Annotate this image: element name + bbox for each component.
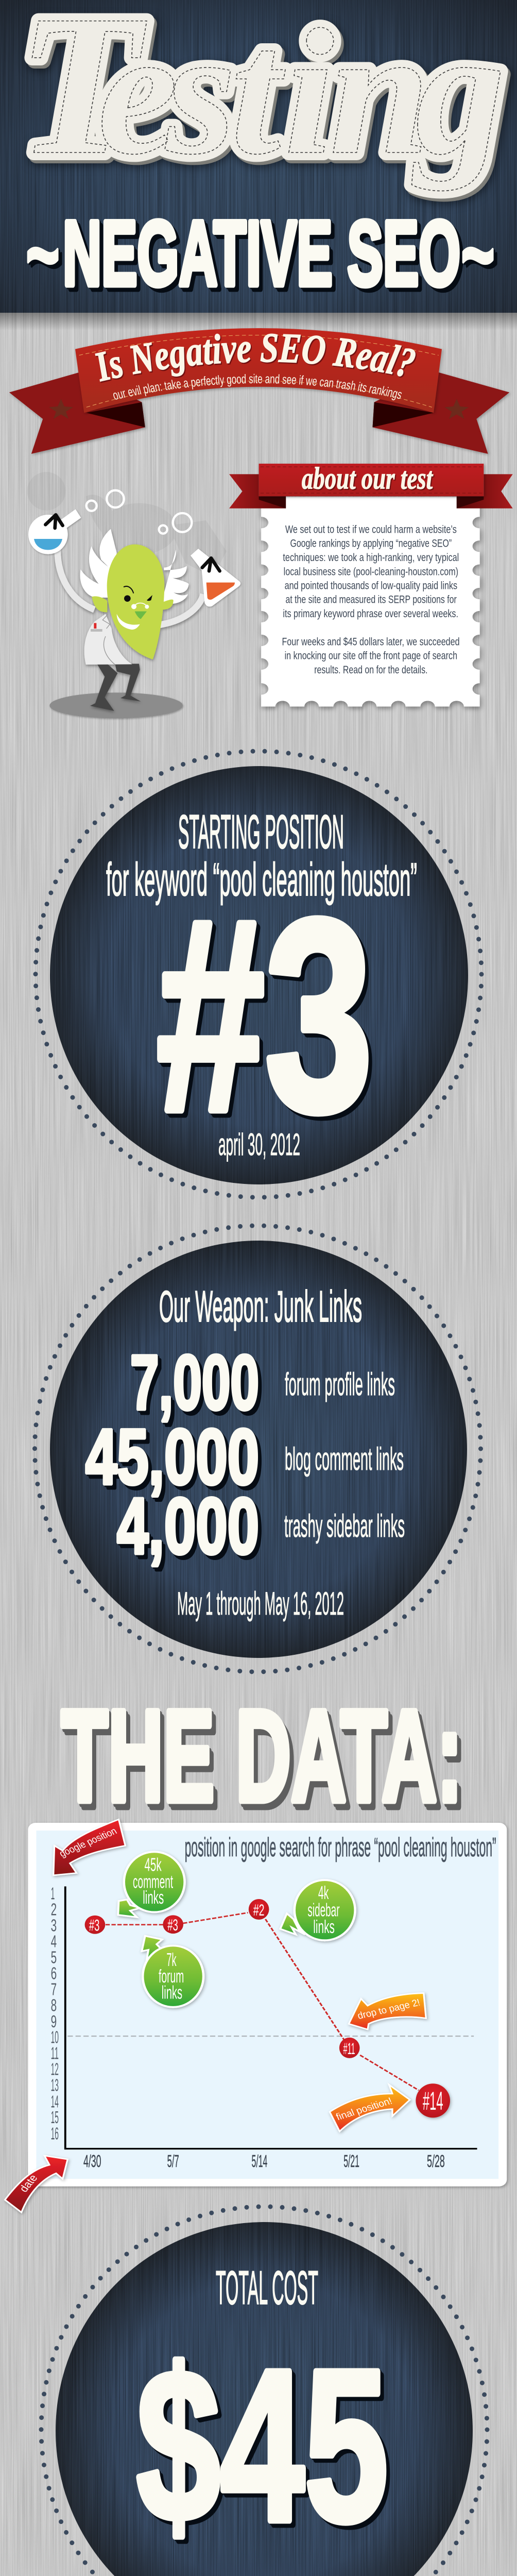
callout: 45k comment links: 45k — [144, 1855, 162, 1875]
callout: 45k comment links — [118, 1852, 185, 1917]
x axis labels: 5/21 — [343, 2151, 359, 2171]
arrow: date: date — [17, 2173, 40, 2194]
ribbon tail right — [373, 371, 509, 454]
arrow: final position — [330, 2084, 410, 2131]
callout: 4k sidebar links: sidebar — [307, 1900, 340, 1921]
panel: chart: 15 — [51, 2108, 59, 2127]
x axis labels — [83, 2151, 445, 2171]
icon: ghost shadows — [27, 472, 227, 577]
panel: chart: 13 — [51, 2075, 59, 2095]
y axis labels: 7 — [51, 1979, 57, 1999]
ribbon body — [259, 464, 484, 496]
arrow: date — [5, 2156, 67, 2212]
icon: orange conical flask — [191, 549, 240, 606]
stat: 7,000: 7,000 — [130, 1339, 259, 1426]
panel: about our test — [229, 461, 513, 706]
arrow: google position — [54, 1819, 125, 1875]
header panel — [0, 0, 517, 330]
data point: #11: #11 — [343, 2040, 355, 2058]
ribbon heading: Is Negative SEO Real? — [95, 334, 417, 383]
panel: starting position: april 30, 2012 — [218, 1127, 300, 1162]
callout: 4k sidebar links: links — [313, 1917, 335, 1937]
dotted ring — [35, 1226, 481, 1672]
stamp paper — [261, 497, 480, 706]
panel: chart: 5/28 — [427, 2151, 445, 2171]
rank line — [106, 1913, 419, 2090]
panel: total cost — [41, 2207, 487, 2576]
ribbon: Is Negative SEO Real? — [9, 328, 511, 455]
callout: 7k forum links — [142, 1936, 203, 2007]
data point: #3: #3 — [167, 1917, 178, 1935]
stat: 45,000: 45,000 — [85, 1413, 259, 1501]
callout: 45k comment links: links — [143, 1888, 164, 1908]
heading: about our test: about our test — [302, 461, 433, 496]
icon: bubbles — [87, 490, 192, 534]
big number: $45: $45 — [136, 2325, 388, 2567]
data point: #14 — [416, 2083, 450, 2117]
mad scientist character — [27, 472, 240, 718]
ribbon tails — [229, 474, 513, 509]
panel: chart — [5, 1819, 507, 2212]
dark circle — [56, 2222, 473, 2576]
stat: 4,000: 4,000 — [117, 1482, 259, 1570]
subtitle: Negative SEO: ~ — [461, 201, 495, 308]
ribbon tail left — [9, 371, 145, 454]
y axis labels: 8 — [51, 1995, 57, 2015]
big number: #3: #3 — [157, 863, 373, 1168]
arrow: google position: google position — [58, 1826, 119, 1859]
x axis labels: 4/30 — [83, 2151, 101, 2171]
icon: blue round flask — [28, 509, 81, 554]
callout: 7k forum links: 7k — [166, 1950, 177, 1970]
arrow: final position: final position! — [335, 2096, 394, 2123]
x axis labels: 5/14 — [252, 2151, 267, 2171]
subtitle: Negative SEO: ~ — [26, 201, 60, 308]
y axis labels: 2 — [51, 1900, 57, 1919]
chart card — [28, 1823, 507, 2187]
ribbon subheading: our evil plan: take a perfectly good site and see if we can trash its rankings — [113, 374, 402, 400]
callout: 45k comment links: comment — [133, 1872, 173, 1892]
data point: #14: #14 — [423, 2087, 443, 2115]
panel: chart: 12 — [51, 2059, 59, 2079]
axes — [65, 1887, 477, 2149]
panel: our weapon — [35, 1226, 481, 1672]
data point: #3 — [85, 1916, 105, 1935]
y axis labels: 9 — [51, 2012, 57, 2031]
y axis labels: 3 — [51, 1916, 57, 1935]
dotted ring — [36, 751, 481, 1197]
data point: #3 — [163, 1915, 183, 1935]
y axis labels — [51, 1884, 59, 2143]
callout: 4k sidebar links — [280, 1880, 355, 1940]
ribbon body — [75, 328, 442, 413]
data point: #2 — [249, 1899, 269, 1920]
data point: #3: #3 — [89, 1917, 99, 1935]
icon: ground shadow — [49, 692, 183, 718]
y axis labels: 1 — [51, 1884, 55, 1903]
icon: scientist — [58, 529, 203, 711]
arrow: drop to page 2 — [349, 1993, 426, 2029]
data point: #11 — [339, 2038, 360, 2058]
arrow: drop to page 2: drop to page 2! — [356, 1997, 422, 2022]
panel: chart: 10 — [51, 2028, 59, 2047]
panel: starting position — [36, 751, 481, 1197]
panel: chart: 16 — [51, 2124, 59, 2143]
data point: #2: #2 — [253, 1902, 265, 1919]
callout: 4k sidebar links: 4k — [318, 1883, 329, 1903]
dotted ring — [41, 2207, 487, 2576]
callout: 7k forum links: forum — [159, 1967, 184, 1987]
panel: chart: 14 — [51, 2092, 59, 2111]
y axis labels: 4 — [51, 1932, 57, 1951]
callout: 7k forum links: links — [162, 1982, 182, 2003]
text block: about our test — [282, 523, 460, 676]
panel: chart: 11 — [51, 2043, 59, 2063]
y axis labels: 5 — [51, 1947, 57, 1967]
y axis labels: 6 — [51, 1963, 57, 1983]
panel: total cost: TOTAL COST — [216, 2262, 318, 2314]
x axis labels: 5/7 — [167, 2151, 179, 2171]
text block: about our test: results. Read on for the details. — [314, 664, 427, 676]
page 2 threshold line — [67, 2035, 474, 2037]
dark circle — [50, 766, 468, 1184]
dark circle — [50, 1241, 467, 1658]
